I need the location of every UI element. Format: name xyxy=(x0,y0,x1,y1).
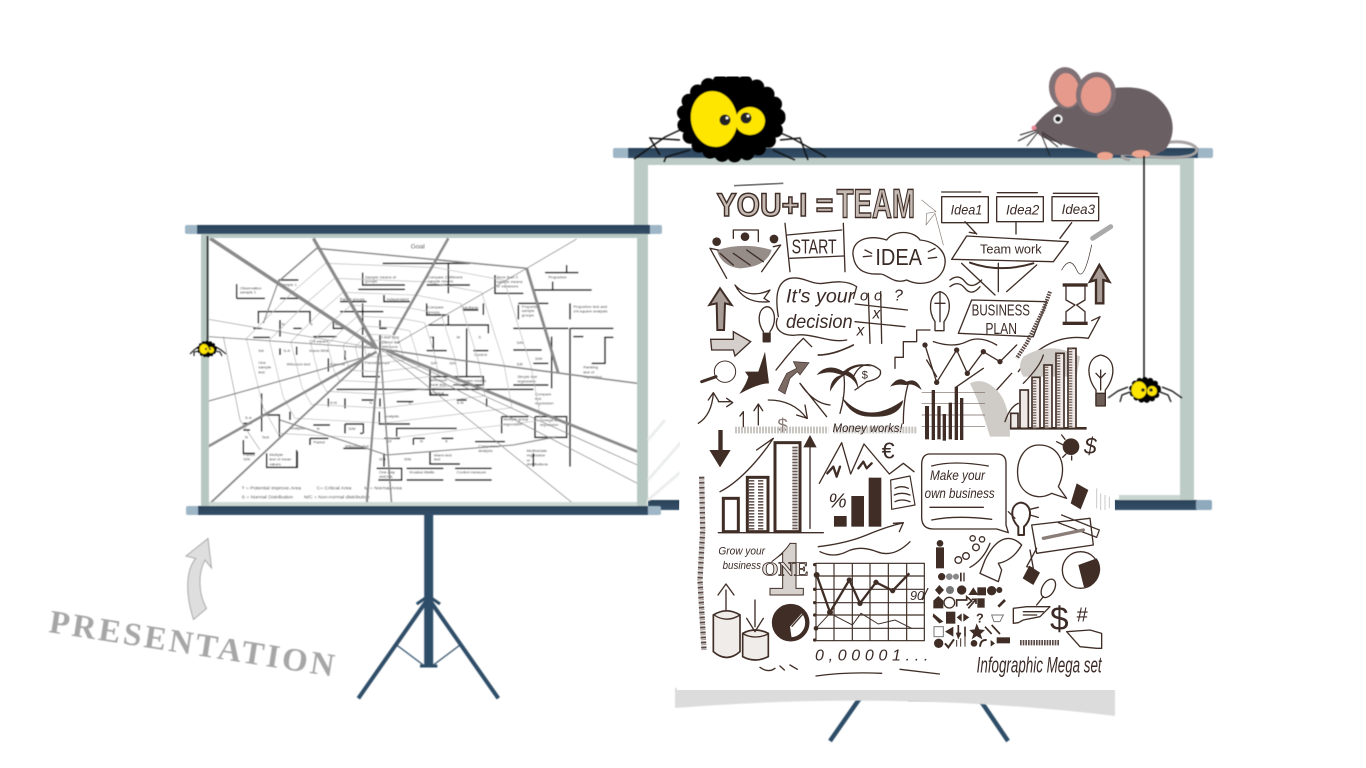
icon grid xyxy=(933,573,1010,648)
icon: mouse on bar xyxy=(1018,65,1197,160)
note page xyxy=(891,476,915,509)
flowchart diagram: Chi-square xyxy=(309,339,330,344)
spider legs xyxy=(634,130,826,162)
icon: hanging spider right xyxy=(1108,156,1182,402)
flowchart diagram: S xyxy=(478,335,481,340)
hand with paper xyxy=(1023,548,1040,585)
icon: sun xyxy=(1057,435,1079,460)
idea cloud xyxy=(853,232,945,283)
pointing hands xyxy=(1013,607,1102,648)
flowchart diagram: regression xyxy=(503,421,522,426)
dollar right: $ xyxy=(1083,433,1097,459)
flowchart diagram: chi-square analysis xyxy=(573,309,607,314)
icon: hanging spider left xyxy=(190,236,226,356)
eyes xyxy=(200,344,214,354)
flowchart diagram: S/I xyxy=(387,439,392,444)
flowchart diagram: Paired groups xyxy=(365,360,390,365)
make your own business bubble xyxy=(922,454,1008,533)
right tripod xyxy=(830,688,1008,741)
flowchart diagram: Omega test xyxy=(540,417,561,422)
line chart with grid: 90 xyxy=(910,589,924,603)
mouse whiskers xyxy=(1018,130,1062,156)
hand sketch xyxy=(980,538,1022,582)
left grunge edge xyxy=(700,477,704,650)
flowchart diagram: Multiple group xyxy=(503,417,529,422)
flowchart diagram: NA xyxy=(258,348,264,353)
spider body xyxy=(684,81,778,155)
flowchart diagram: N xyxy=(335,321,338,326)
flowchart diagram: Mann-Whit xyxy=(309,348,329,353)
flowchart diagram: S/N xyxy=(449,361,456,366)
flowchart diagram: Multivariate xyxy=(527,448,548,453)
idea boxes xyxy=(942,192,1099,223)
flowchart diagram: N xyxy=(369,400,372,405)
flowchart diagram: S/N xyxy=(517,340,523,345)
heading: presentation label: PRESENTATION xyxy=(47,604,337,684)
euro sign: € xyxy=(882,437,895,463)
stairs doodle xyxy=(895,330,930,368)
flowchart diagram: Kruskal-Wallis xyxy=(409,469,434,474)
big number one xyxy=(762,543,808,595)
icon: black swoosh arrow xyxy=(739,352,769,394)
flowchart diagram: test of xyxy=(583,369,595,374)
panel: right projector screen xyxy=(613,148,1213,741)
body xyxy=(1132,380,1158,400)
bar chart doodle xyxy=(922,387,985,441)
idea cloud: IDEA xyxy=(875,244,922,270)
flowchart diagram: S/N xyxy=(379,457,386,462)
flowchart diagram: groups xyxy=(522,312,534,317)
mouse ears xyxy=(1046,65,1120,120)
solid bars xyxy=(834,478,881,527)
flowchart diagram: More than 2 xyxy=(497,275,519,280)
flowchart diagram: N xyxy=(420,439,423,444)
cylinders with arrows xyxy=(713,584,768,660)
flowchart diagram: paired test xyxy=(382,339,401,344)
small arrow and pencil xyxy=(922,200,1111,274)
pencil xyxy=(734,183,783,186)
magnifier small xyxy=(1037,577,1059,605)
icon: hourglass xyxy=(1063,283,1088,325)
flowchart diagram: S-A xyxy=(283,348,290,353)
speech bubble circle xyxy=(1018,445,1067,498)
flowchart diagram: Goal xyxy=(411,244,425,251)
flowchart diagram: test xyxy=(535,396,542,401)
3d bar chart xyxy=(718,435,823,533)
heading: you + I = team xyxy=(717,181,915,227)
tic tac toe: o xyxy=(860,289,868,305)
paper shadow xyxy=(675,688,1115,716)
flowchart diagram: N xyxy=(245,434,248,439)
paper xyxy=(677,178,1116,690)
flowchart diagram: regression xyxy=(540,422,559,427)
flowchart diagram: sample xyxy=(522,308,535,313)
flowchart diagram: sample means xyxy=(427,279,453,284)
flow chart and web drawing xyxy=(207,238,637,505)
legs xyxy=(1108,387,1182,402)
flowchart diagram: S-A xyxy=(245,415,252,420)
business plan: BUSINESS xyxy=(972,302,1030,319)
decision frame xyxy=(776,278,857,341)
flowchart diagram: Compare means xyxy=(457,378,486,383)
left tripod xyxy=(358,515,498,698)
icon: pie chart xyxy=(1062,552,1100,588)
icon: person on bed xyxy=(710,230,781,278)
icon: up arrow right xyxy=(1090,265,1109,303)
bottom frame shading xyxy=(209,502,637,506)
flowchart diagram: S xyxy=(445,439,448,444)
tic tac toe: o xyxy=(874,289,882,305)
doodles lower half xyxy=(700,430,1109,678)
flowchart diagram: Compare 2 different xyxy=(427,275,463,280)
flowchart diagram: S/N xyxy=(243,457,250,462)
scribbled lines xyxy=(760,665,939,676)
curved arrows xyxy=(776,317,1100,372)
panel: left projector screen xyxy=(185,225,662,698)
flowchart diagram: N xyxy=(317,426,320,431)
flowchart diagram: S-N xyxy=(457,400,464,405)
flowchart diagram: Sample 1 xyxy=(280,282,298,287)
icon: clock dial xyxy=(774,606,807,639)
icon: lightbulb xyxy=(759,307,774,342)
note with ruler xyxy=(1032,515,1099,553)
percent sign: % xyxy=(828,489,847,512)
panel: doodle paper sheet xyxy=(677,178,1116,690)
arrow scribble xyxy=(818,523,910,555)
icon: bulb top xyxy=(930,292,949,331)
left screen frame xyxy=(201,233,647,506)
flowchart diagram: C= Critical Area xyxy=(317,485,352,491)
zigzag chart doodle xyxy=(819,443,914,483)
faint reflection xyxy=(648,420,683,500)
business plan: PLAN xyxy=(985,321,1017,338)
left screen top bar xyxy=(185,225,662,234)
right screen frame xyxy=(634,158,1194,500)
tic tac toe: x xyxy=(856,322,866,339)
left screen bottom bar xyxy=(186,506,661,515)
thread xyxy=(1143,156,1145,378)
grey world map blotch xyxy=(970,348,1080,437)
flowchart diagram: N xyxy=(282,321,285,326)
caption: infographic mega set: Infographic Mega set xyxy=(977,653,1102,678)
flowchart diagram: Control xyxy=(474,352,487,357)
flowchart diagram: rank test xyxy=(431,382,447,387)
flowchart diagram: Paired xyxy=(313,439,325,444)
eyes xyxy=(1132,382,1157,398)
flowchart diagram: test xyxy=(258,369,266,374)
business plan xyxy=(958,292,1050,358)
body xyxy=(199,342,215,356)
icon: grey arrow xyxy=(778,362,809,394)
grunge strip xyxy=(1020,635,1060,651)
right screen top bar xyxy=(613,148,1213,158)
flowchart diagram: Proportion test and xyxy=(573,304,607,309)
flowchart diagram: M xyxy=(457,335,460,340)
flowchart diagram: Control measure xyxy=(457,469,487,474)
flowchart diagram: Ranking xyxy=(583,365,598,370)
icon: up arrow xyxy=(709,288,732,330)
idea boxes: Idea2 xyxy=(1006,202,1040,218)
make your own business bubble: own business xyxy=(925,485,995,501)
screen surface xyxy=(205,236,641,506)
icon: magnifier xyxy=(702,361,736,382)
person icon xyxy=(936,540,944,568)
flowchart diagram: S/M xyxy=(404,457,411,462)
mouse tail xyxy=(1122,142,1197,160)
flowchart diagram: groups xyxy=(427,309,440,314)
flowchart diagram: Proportion xyxy=(522,304,540,309)
flowchart diagram: S = Normal Distribution xyxy=(242,495,293,501)
flowchart diagram: S xyxy=(408,400,411,405)
flowchart diagram: Independent xyxy=(387,296,410,301)
flowchart diagram: Test xyxy=(262,434,270,439)
flowchart diagram: M = Normal Area xyxy=(364,485,402,491)
flowchart diagram: Wilcoxon xyxy=(382,344,398,349)
legs xyxy=(190,347,226,356)
right screen bottom bar xyxy=(648,495,1212,510)
flowchart diagram: Compare xyxy=(535,391,552,396)
flowchart diagram: Wilcoxon test xyxy=(287,361,311,366)
tic tac toe xyxy=(855,288,907,343)
flowchart diagram: Simple test xyxy=(517,374,538,379)
flowchart diagram: N/C = Non-normal distribution xyxy=(304,495,370,501)
icon: down arrow xyxy=(709,430,731,467)
flowchart diagram: Comparison xyxy=(478,443,500,448)
flowchart diagram: analysis xyxy=(478,448,493,453)
mouse feet and nose xyxy=(1032,126,1150,160)
flowchart diagram: Mann-W xyxy=(330,361,345,366)
flowchart diagram: One-way xyxy=(379,469,395,474)
flowchart diagram: Mann-test xyxy=(434,453,453,458)
line chart doodle xyxy=(922,339,1017,390)
black bag xyxy=(1071,483,1088,509)
flowchart diagram: T = Potential Improve.Area xyxy=(242,485,301,491)
icon: arrow right xyxy=(711,332,751,356)
flowchart diagram: regression xyxy=(527,453,545,458)
flowchart diagram: Proportion xyxy=(548,275,567,280)
flowchart diagram: Compare xyxy=(427,305,445,310)
mouse body xyxy=(1033,87,1173,155)
flowchart diagram: or variances xyxy=(497,284,518,289)
flowchart diagram: Analysis xyxy=(290,425,305,430)
line chart with grid: / xyxy=(922,585,930,604)
icon: hammock and palms xyxy=(817,364,922,423)
flowchart diagram: regression xyxy=(535,400,554,405)
flowchart diagram: Multiple xyxy=(463,305,479,310)
flowchart diagram: S/N xyxy=(431,361,437,366)
flowchart diagram: N xyxy=(430,335,433,340)
flowchart diagram: sign rank xyxy=(382,348,398,353)
flowchart diagram: sample means xyxy=(497,279,523,284)
flowchart diagram: Paired groups xyxy=(340,297,365,302)
flowchart diagram: or xyxy=(527,457,531,462)
handwritten caption: grow your business xyxy=(718,545,766,572)
flowchart diagram: One xyxy=(258,360,267,365)
start flag: START xyxy=(792,235,837,258)
idea boxes: Idea1 xyxy=(951,202,982,218)
flowchart diagram: t-test type xyxy=(382,335,400,340)
flowchart diagram: Analysis xyxy=(384,413,399,418)
icon grid: ? xyxy=(976,612,984,626)
icon: lightbulb right xyxy=(1089,355,1113,406)
make your own business bubble: Make your xyxy=(930,467,986,483)
flowchart diagram: test xyxy=(434,457,441,462)
flowchart diagram: values xyxy=(269,461,281,466)
flowchart diagram: regression xyxy=(583,374,602,379)
flowchart diagram: S xyxy=(310,321,313,326)
flowchart diagram: Kruskal xyxy=(431,391,444,396)
flowchart diagram: distributions xyxy=(527,461,548,466)
flowchart diagram: sample 1 xyxy=(240,289,257,294)
mouse eye xyxy=(1054,114,1062,124)
ring scribble xyxy=(955,536,990,567)
flowchart diagram: regression xyxy=(517,379,536,384)
big number one: ONE xyxy=(762,558,808,580)
big dollar and hash: # xyxy=(1077,605,1089,627)
tic tac toe: x xyxy=(872,306,882,323)
bulb doodle xyxy=(1008,503,1038,535)
caption: money works: Money works! xyxy=(833,421,903,435)
doodles upper half xyxy=(698,181,1113,441)
grime band xyxy=(735,420,917,440)
decision frame: It's your xyxy=(786,287,856,308)
zeros text: 0,00001... xyxy=(815,648,928,665)
handwritten caption: grow your business: business xyxy=(723,560,761,572)
banner xyxy=(735,285,770,302)
wavy line xyxy=(950,277,982,292)
dollar sign: $ xyxy=(777,415,788,436)
flowchart diagram: groups xyxy=(365,279,377,284)
heading: you + I = team: TEAM xyxy=(837,181,915,227)
flowchart diagram: S-N xyxy=(330,400,337,405)
small arrows xyxy=(698,383,830,427)
flowchart diagram: S/E xyxy=(517,361,523,366)
flowchart diagram: Sample means of xyxy=(365,275,397,280)
icon: large spider on bar xyxy=(634,81,826,162)
icon: curved arrow pointing up xyxy=(186,538,212,620)
icon: hammock and palms: $ xyxy=(862,369,869,381)
idea boxes: Idea3 xyxy=(1062,201,1095,217)
team work banner: Team work xyxy=(980,241,1042,256)
flowchart diagram: Paired xyxy=(243,452,255,457)
thread xyxy=(206,236,208,343)
heading: you + I = team: YOU+I = xyxy=(717,187,833,223)
team work banner xyxy=(952,222,1072,295)
3d bars doodle xyxy=(1005,348,1087,428)
flowchart diagram: Multiple xyxy=(269,452,284,457)
spider eyes xyxy=(686,87,765,151)
flowchart diagram: Wilcoxon xyxy=(431,377,447,382)
flowchart diagram: test of mean xyxy=(269,457,291,462)
flowchart diagram: ANOVA xyxy=(379,474,393,479)
big dollar and hash: $ xyxy=(1050,601,1069,638)
spider web xyxy=(207,238,637,505)
flowchart diagram: S/M xyxy=(535,356,542,361)
handwritten caption: grow your business: Grow your xyxy=(718,545,766,557)
start flag xyxy=(785,223,845,272)
line chart with grid xyxy=(813,563,930,642)
flowchart diagram: sample xyxy=(258,365,272,370)
flowchart diagram: Observation xyxy=(240,285,261,290)
decision frame: decision xyxy=(786,312,853,333)
faint scratches xyxy=(1097,488,1109,510)
tic tac toe: ? xyxy=(894,288,903,305)
big dollar and hash xyxy=(1050,601,1089,638)
flowchart diagram: S/M xyxy=(348,426,355,431)
flowchart diagram: Wilcoxon test xyxy=(345,443,370,448)
flowchart diagram xyxy=(237,244,613,501)
